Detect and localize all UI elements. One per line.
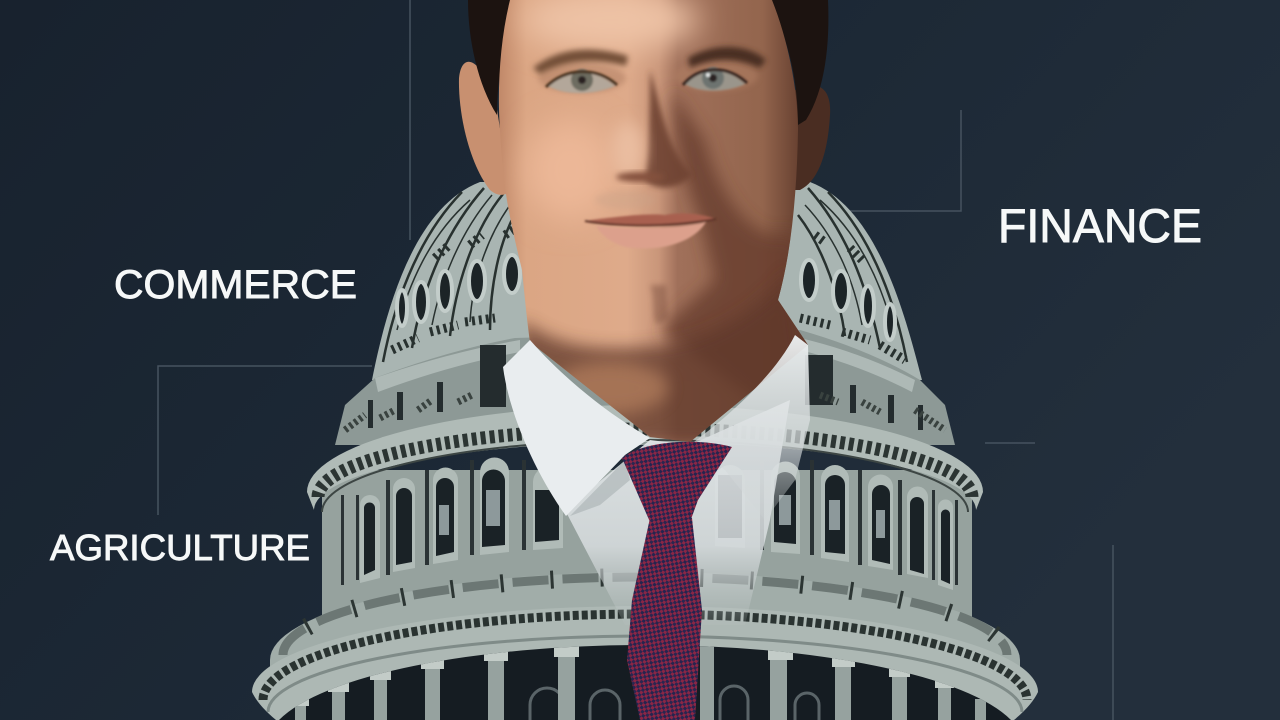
shirt: collar shadow: [570, 460, 630, 516]
face: cheek light: [525, 120, 615, 220]
upper lip shading: [598, 193, 632, 206]
eye: right: [683, 67, 747, 91]
connector lines: [158, 0, 1113, 720]
face: right shadow: [656, 94, 808, 394]
necktie: [622, 442, 732, 720]
eye socket shadows: [538, 61, 758, 93]
ear: left: [459, 62, 510, 195]
neck: centre tone: [552, 362, 668, 414]
man portrait: [459, 0, 830, 445]
label: finance: FINANCE: [998, 199, 1202, 252]
dome: colonnade: [279, 645, 1011, 720]
mouth: [585, 213, 716, 249]
label: commerce: COMMERCE: [114, 263, 357, 307]
neck and face: [495, 0, 815, 445]
eye: left: [546, 69, 617, 93]
ear: right: [790, 85, 830, 190]
eyebrow: left: [533, 50, 628, 74]
nostril shadow: [616, 172, 664, 182]
label: agriculture: AGRICULTURE: [50, 527, 310, 568]
dome: drum cornice: [307, 405, 983, 512]
nose highlight: [612, 122, 644, 178]
dome: balustrade: [270, 572, 1020, 700]
dome: upper ribbed cupola: [372, 182, 922, 380]
chin crease: [650, 285, 668, 325]
dome: drum bays and windows: [341, 458, 958, 590]
hair: [468, 0, 828, 125]
Capitol dome: [252, 182, 1038, 720]
neck shadow: [527, 281, 798, 442]
shirt: left collar: [503, 340, 650, 516]
dome: peristyle blocks: [335, 330, 955, 445]
shirt: translucent body: [565, 400, 790, 625]
nose shadow: [645, 70, 692, 188]
shirt: [503, 335, 810, 625]
shirt: right collar: [690, 335, 810, 520]
dome: drum wall: [322, 470, 972, 640]
dome: lower entablature: [252, 606, 1038, 720]
face: forehead light: [520, 0, 700, 50]
eyebrow: right: [688, 47, 766, 68]
